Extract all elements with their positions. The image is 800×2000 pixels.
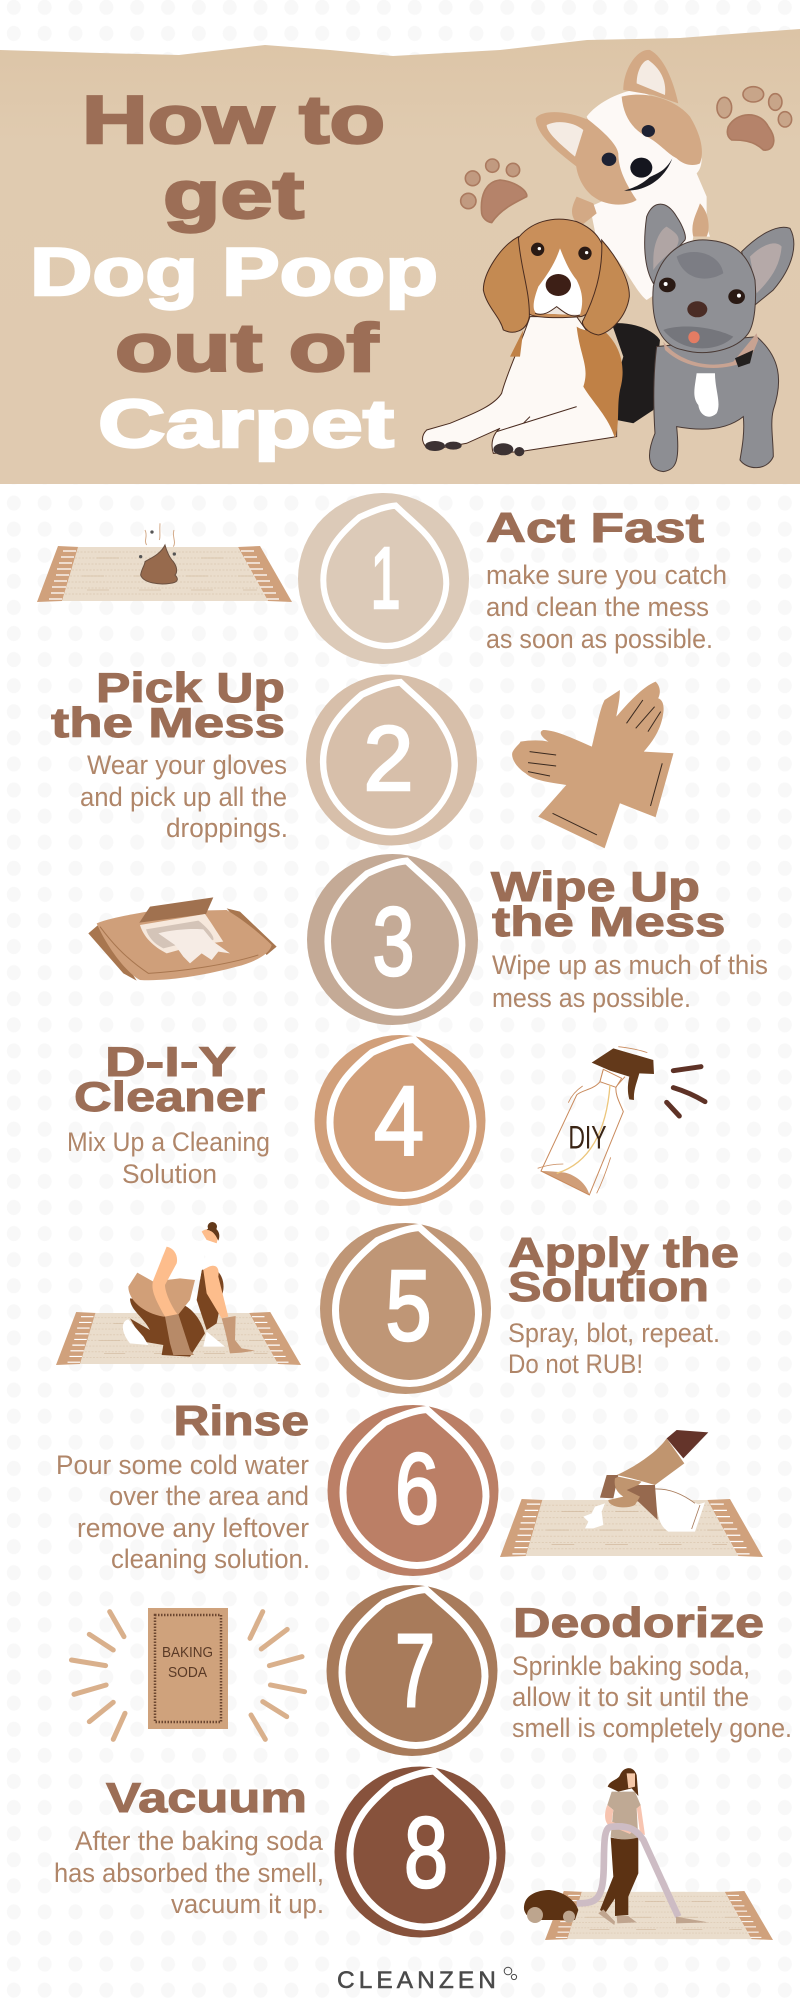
step 1 text: as soon as possible. [486, 624, 713, 654]
title: Dog Poop [30, 234, 438, 310]
step 5 text: Do not RUB! [508, 1349, 643, 1379]
step 3 number badge: 3 [372, 887, 414, 996]
icon: wipes package [88, 897, 277, 981]
step 1 text: Act Fast [486, 504, 704, 551]
step 7 text: Deodorize [513, 1599, 764, 1646]
step 8 text: vacuum it up. [171, 1889, 324, 1919]
step 8 number badge [334, 1766, 506, 1938]
step 5 text: Spray, blot, repeat. [508, 1318, 720, 1348]
bottle label: DIY [568, 1119, 607, 1155]
rays [71, 1612, 305, 1739]
step 4 text: D-I-Y [105, 1038, 236, 1085]
title: Carpet [98, 386, 394, 462]
step 3 text: Wipe up as much of this [492, 950, 768, 980]
step 2 text [51, 664, 288, 843]
step 6 number badge: 6 [395, 1433, 439, 1545]
step 7 text: allow it to sit until the [512, 1682, 749, 1712]
icon: left paw print [461, 159, 527, 223]
step 6 text: Rinse [174, 1397, 309, 1444]
step 2 number badge: 2 [364, 708, 414, 810]
title: out of [115, 310, 378, 386]
step 1 text: and clean the mess [486, 592, 709, 622]
step 3 text: mess as possible. [492, 983, 691, 1013]
step 7 number badge: 7 [395, 1614, 435, 1730]
step 7 text [512, 1599, 792, 1743]
title: How to [82, 82, 385, 158]
step 7 number badge [326, 1585, 498, 1756]
step 8 text [54, 1774, 324, 1919]
step 5 number badge [320, 1223, 491, 1394]
step 4 number badge: 4 [374, 1066, 424, 1176]
step 2 number badge [306, 674, 477, 846]
icon: DIY spray bottle [538, 1047, 705, 1195]
step 5 text: Apply the [508, 1229, 739, 1276]
step 3 text: the Mess [492, 898, 726, 945]
step 1 rug with poop illustration [37, 523, 292, 602]
title [30, 82, 438, 462]
step 6 text [56, 1397, 310, 1574]
step 4 text [67, 1038, 270, 1189]
step 1 number badge: 1 [370, 530, 401, 627]
title: get [163, 157, 304, 233]
icon: gloves [512, 682, 673, 848]
footer logo: CLEANZEN: CLEANZEN [337, 1967, 500, 1994]
step 1 text: make sure you catch [486, 560, 727, 590]
illustration: corgi [536, 50, 710, 300]
step 1 text [486, 504, 727, 654]
step 3 number badge [307, 854, 478, 1025]
step 2 text: the Mess [51, 699, 285, 746]
step 3 text [491, 863, 768, 1013]
step 8 number badge: 8 [404, 1797, 448, 1909]
step 6 text: cleaning solution. [111, 1544, 310, 1574]
step 5 number badge: 5 [386, 1250, 432, 1362]
step 3 text: Wipe Up [491, 863, 700, 910]
step 4 text: Solution [122, 1159, 217, 1189]
step 8 text: Vacuum [106, 1774, 307, 1821]
step 2 text: Pick Up [96, 664, 285, 711]
step 6 text: over the area and [109, 1481, 309, 1511]
illustration: beagle [423, 219, 660, 456]
step 8 text: has absorbed the smell, [54, 1858, 324, 1888]
icon: poop [139, 523, 177, 584]
step 4 text: Mix Up a Cleaning [67, 1127, 270, 1157]
step 2 text: Wear your gloves [87, 750, 287, 780]
step 2 text: droppings. [166, 813, 288, 843]
step 5 illustration: kneeling woman on rug [56, 1222, 301, 1365]
step 6 number badge [328, 1405, 498, 1576]
header banner [0, 29, 800, 484]
step 2 text: and pick up all the [80, 782, 287, 812]
step 5 text: Solution [508, 1263, 709, 1310]
step 8 text: After the baking soda [75, 1826, 324, 1856]
step 6 text: remove any leftover [77, 1513, 309, 1543]
step 6 text: Pour some cold water [56, 1450, 309, 1480]
icon: right paw print [717, 87, 792, 150]
illustration: french bulldog [645, 204, 794, 472]
step 4 number badge [314, 1035, 486, 1206]
icon: baking soda box with rays: SODA [168, 1664, 207, 1681]
step 5 text [508, 1229, 739, 1379]
step 7 text: Sprinkle baking soda, [512, 1651, 750, 1681]
step 4 text: Cleaner [74, 1073, 265, 1120]
step 8 illustration: woman vacuuming rug [524, 1768, 773, 1940]
step 1 number badge [298, 493, 469, 664]
box label: BAKING [162, 1644, 213, 1661]
icon: baking soda box with rays [71, 1608, 305, 1739]
step 6 illustration: rinsing rug [500, 1430, 763, 1557]
